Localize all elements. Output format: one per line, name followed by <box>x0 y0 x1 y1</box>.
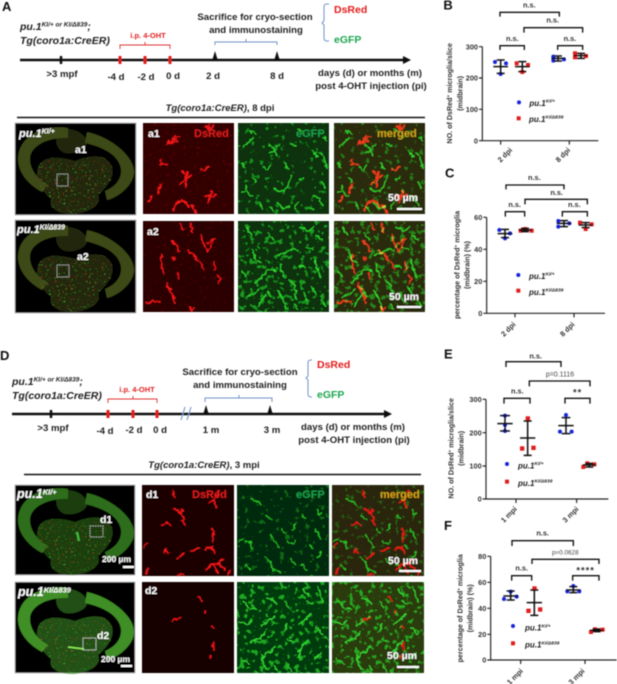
micrograph a1 DsRed: DsRed <box>194 128 229 140</box>
timeline labels: -4 d <box>107 72 125 83</box>
micrograph d1 merged: 50 µm <box>388 555 418 567</box>
axes: + <box>456 588 461 591</box>
legend: pu.1 <box>525 624 541 633</box>
micrograph d2 DsRed: d2 <box>145 585 157 597</box>
data points <box>497 219 594 240</box>
timeline labels: 0 d <box>166 71 180 82</box>
genotype label <box>19 21 110 47</box>
axes: + <box>446 94 451 97</box>
brain section d2: pu.1 <box>18 585 44 599</box>
legend: pu.1 <box>518 461 534 470</box>
genotype label: KI/+ or KI/Δ839 <box>34 376 80 384</box>
axes: 40 <box>474 245 482 254</box>
axes <box>446 42 598 164</box>
brain section a1 <box>15 123 136 215</box>
legend: KI/+ <box>546 99 555 105</box>
panel letter D: D <box>0 348 9 363</box>
axes: percentage of DsRed <box>456 591 464 662</box>
significance brackets: n.s. <box>506 34 519 43</box>
timeline labels: -2 d <box>137 72 155 83</box>
axes: microglia <box>456 553 464 588</box>
significance brackets: **** <box>576 565 595 575</box>
timeline labels: -2 d <box>125 425 143 436</box>
axes: microglia/slice <box>446 43 454 95</box>
axes: 1 mpi <box>499 505 519 524</box>
brain section a2: KI/Δ839 <box>40 224 65 232</box>
axes: NO. of DsRed <box>447 452 455 499</box>
brain section d2: d2 <box>97 630 109 642</box>
staining legend <box>322 4 367 46</box>
data points <box>493 51 588 76</box>
axes: 3 mpi <box>561 505 581 524</box>
sacrifice bracket <box>205 395 272 402</box>
axes: (midbrain) <box>457 430 465 466</box>
significance brackets <box>500 0 583 50</box>
axes: 300 <box>469 395 482 404</box>
letter F: F <box>444 518 452 533</box>
micrograph d1 DsRed <box>142 485 234 576</box>
brain section a1: KI/+ <box>42 128 55 136</box>
timeline labels: >3 mpf <box>46 69 78 80</box>
timeline labels: 0 d <box>153 425 167 436</box>
significance brackets: ** <box>573 388 582 398</box>
brain section a1: a1 <box>75 144 87 156</box>
significance brackets: n.s. <box>536 529 549 538</box>
axes: 60 <box>478 578 486 587</box>
brain section a1: pu.1 <box>19 128 42 140</box>
timeline labels: days (d) or months (m) <box>301 422 405 433</box>
data points <box>497 413 596 469</box>
genotype label <box>11 376 102 402</box>
genotype label: ; <box>87 21 91 33</box>
significance brackets: n.s. <box>568 200 581 209</box>
timeline labels: and immunostaining <box>193 380 287 391</box>
axes <box>447 395 608 524</box>
section title: Tg(coro1a:CreER), 3 mpi <box>148 460 260 471</box>
micrograph a1 DsRed <box>143 123 234 214</box>
timeline arrow <box>20 51 411 64</box>
significance brackets: n.s. <box>528 173 541 182</box>
timeline labels <box>37 367 410 446</box>
axes: 300 <box>466 42 478 51</box>
sacrifice bracket <box>215 39 277 45</box>
timeline labels: 1 m <box>203 425 219 436</box>
staining legend <box>306 359 350 401</box>
axes: 40 <box>478 604 486 613</box>
injection bracket: i.p. 4-OHT <box>119 385 155 394</box>
axes: 2 dpi <box>496 146 514 164</box>
section title: Tg(coro1a:CreER), 8 dpi <box>166 103 274 114</box>
axes: (midbrain) <box>456 75 464 111</box>
legend: pu.1 <box>529 115 545 124</box>
legend <box>505 461 553 488</box>
micrograph d1 merged <box>332 485 424 576</box>
legend: KI/+ <box>541 623 551 629</box>
axes: microglia/slice <box>447 398 455 450</box>
chart F <box>444 518 617 684</box>
axes: 0 <box>478 495 482 504</box>
axes <box>453 210 605 338</box>
brain section d1: KI/+ <box>43 488 57 496</box>
letter C: C <box>445 166 455 181</box>
significance brackets: n.s. <box>529 351 542 360</box>
timeline labels <box>46 12 427 92</box>
legend: pu.1 <box>529 288 545 297</box>
chart E <box>444 346 608 524</box>
legend: KI/Δ839 <box>545 115 564 121</box>
axes: 0 <box>474 136 478 145</box>
genotype label: Tg(coro1a:CreER) <box>12 390 102 402</box>
timeline labels: Sacrifice for cryo-section <box>197 12 313 23</box>
micrograph a1 merged: merged <box>377 128 417 140</box>
injection bracket: i.p. 4-OHT <box>130 31 166 40</box>
brain section d1: d1 <box>100 514 112 526</box>
significance brackets: n.s. <box>523 0 536 9</box>
axes: 100 <box>466 105 478 114</box>
timeline labels: -4 d <box>96 426 114 437</box>
axes: 100 <box>469 462 482 471</box>
micrograph a2 DsRed <box>143 221 234 312</box>
legend <box>517 99 564 124</box>
brain section d2 <box>15 582 135 674</box>
staining legend: eGFP <box>334 34 361 46</box>
panel A <box>2 0 427 313</box>
significance brackets <box>504 351 590 404</box>
axes: 20 <box>478 630 486 639</box>
brain section a2 <box>15 220 136 313</box>
chart C <box>445 166 605 338</box>
significance brackets: n.s. <box>546 16 559 25</box>
legend: KI/+ <box>534 461 544 467</box>
injection bracket <box>120 31 170 49</box>
axes: 0 <box>478 309 482 318</box>
legend: KI/Δ839 <box>545 288 564 294</box>
legend: pu.1 <box>529 272 545 281</box>
genotype label: pu.1 <box>20 21 42 33</box>
axes: NO. of DsRed <box>446 97 454 144</box>
micrograph d1 eGFP: eGFP <box>296 489 325 501</box>
micrograph d2 eGFP <box>237 582 329 673</box>
staining legend: DsRed <box>334 4 367 16</box>
axes: percentage of DsRed <box>453 247 461 319</box>
micrograph a2 merged <box>334 221 425 312</box>
axes: + <box>453 244 458 247</box>
significance brackets: n.s. <box>564 34 576 43</box>
timeline arrow <box>12 405 392 420</box>
axes: 8 dpi <box>554 146 572 164</box>
axes: + <box>447 449 452 452</box>
timeline labels: Sacrifice for cryo-section <box>182 367 298 378</box>
significance brackets: p=0.0628 <box>552 550 579 557</box>
micrograph a2 eGFP <box>238 221 329 312</box>
legend <box>511 623 560 650</box>
micrograph a1 merged <box>334 123 425 214</box>
significance brackets: n.s. <box>508 200 521 209</box>
axes: 200 <box>466 74 478 83</box>
micrograph d1 merged: merged <box>380 489 420 501</box>
timeline labels: 8 d <box>270 71 284 82</box>
brain section d1: pu.1 <box>17 487 43 501</box>
micrograph d2 merged: 50 µm <box>387 650 417 662</box>
injection bracket <box>108 385 157 403</box>
staining legend: eGFP <box>317 389 344 401</box>
axes: (midbrain) (%) <box>466 584 474 632</box>
micrograph a1 DsRed: a1 <box>148 128 160 140</box>
genotype label: pu.1 <box>12 376 34 388</box>
panel D <box>0 348 424 674</box>
genotype label: KI/+ or KI/Δ839 <box>42 22 88 28</box>
brain section d2: 200 µm <box>101 654 130 664</box>
legend: pu.1 <box>518 479 534 488</box>
axes: 0 <box>482 656 486 665</box>
brain section d1 <box>15 485 135 575</box>
data points <box>502 584 605 634</box>
timeline labels: and immunostaining <box>209 25 303 36</box>
micrograph a2 merged: 50 µm <box>389 291 419 303</box>
timeline labels: post 4-OHT injection (pi) <box>315 81 427 92</box>
brain section a2: a2 <box>77 251 89 263</box>
staining legend: DsRed <box>317 359 350 371</box>
timeline labels: 3 m <box>264 425 280 436</box>
axes: 2 dpi <box>499 320 517 338</box>
significance brackets <box>512 529 599 581</box>
timeline labels: post 4-OHT injection (pi) <box>298 435 410 446</box>
letter E: E <box>444 346 453 361</box>
legend: KI/+ <box>545 272 555 278</box>
legend: KI/Δ839 <box>541 640 560 646</box>
axes: 8 dpi <box>558 320 576 338</box>
genotype label: ; <box>79 376 83 388</box>
micrograph d1 DsRed: d1 <box>146 489 158 501</box>
axes: 80 <box>478 552 486 561</box>
axes: 200 <box>469 428 482 437</box>
axes: microglia <box>453 210 461 245</box>
micrograph d1 DsRed: DsRed <box>192 489 227 501</box>
micrograph a1 eGFP: eGFP <box>296 128 325 140</box>
timeline labels: 2 d <box>206 71 220 82</box>
timeline labels: days (d) or months (m) <box>318 68 422 79</box>
axes: 20 <box>474 277 482 286</box>
genotype label: Tg(coro1a:CreER) <box>20 35 110 47</box>
legend: pu.1 <box>529 99 546 108</box>
micrograph d2 DsRed <box>142 582 234 673</box>
micrograph d2 merged <box>332 582 424 673</box>
legend: KI/Δ839 <box>534 479 553 485</box>
micrograph a1 eGFP <box>238 123 329 214</box>
significance brackets: n.s. <box>550 188 563 197</box>
significance brackets: n.s. <box>511 387 524 396</box>
micrograph d1 eGFP <box>237 485 329 576</box>
significance brackets: p=0.1116 <box>546 371 574 378</box>
legend: pu.1 <box>525 641 541 650</box>
micrograph a1 merged: 50 µm <box>388 192 418 204</box>
significance brackets <box>505 173 587 217</box>
brain section a2: pu.1 <box>17 224 40 236</box>
axes: 60 <box>474 213 482 222</box>
brain section d1: 200 µm <box>102 554 131 564</box>
timeline labels: >3 mpf <box>37 423 69 434</box>
legend <box>516 272 564 297</box>
axes <box>456 552 617 684</box>
brain section d2: KI/Δ839 <box>44 586 72 594</box>
micrograph a2 DsRed: a2 <box>147 226 159 238</box>
chart B <box>443 0 598 164</box>
axes: (midbrain) (%) <box>463 240 471 289</box>
significance brackets: n.s. <box>515 563 528 572</box>
